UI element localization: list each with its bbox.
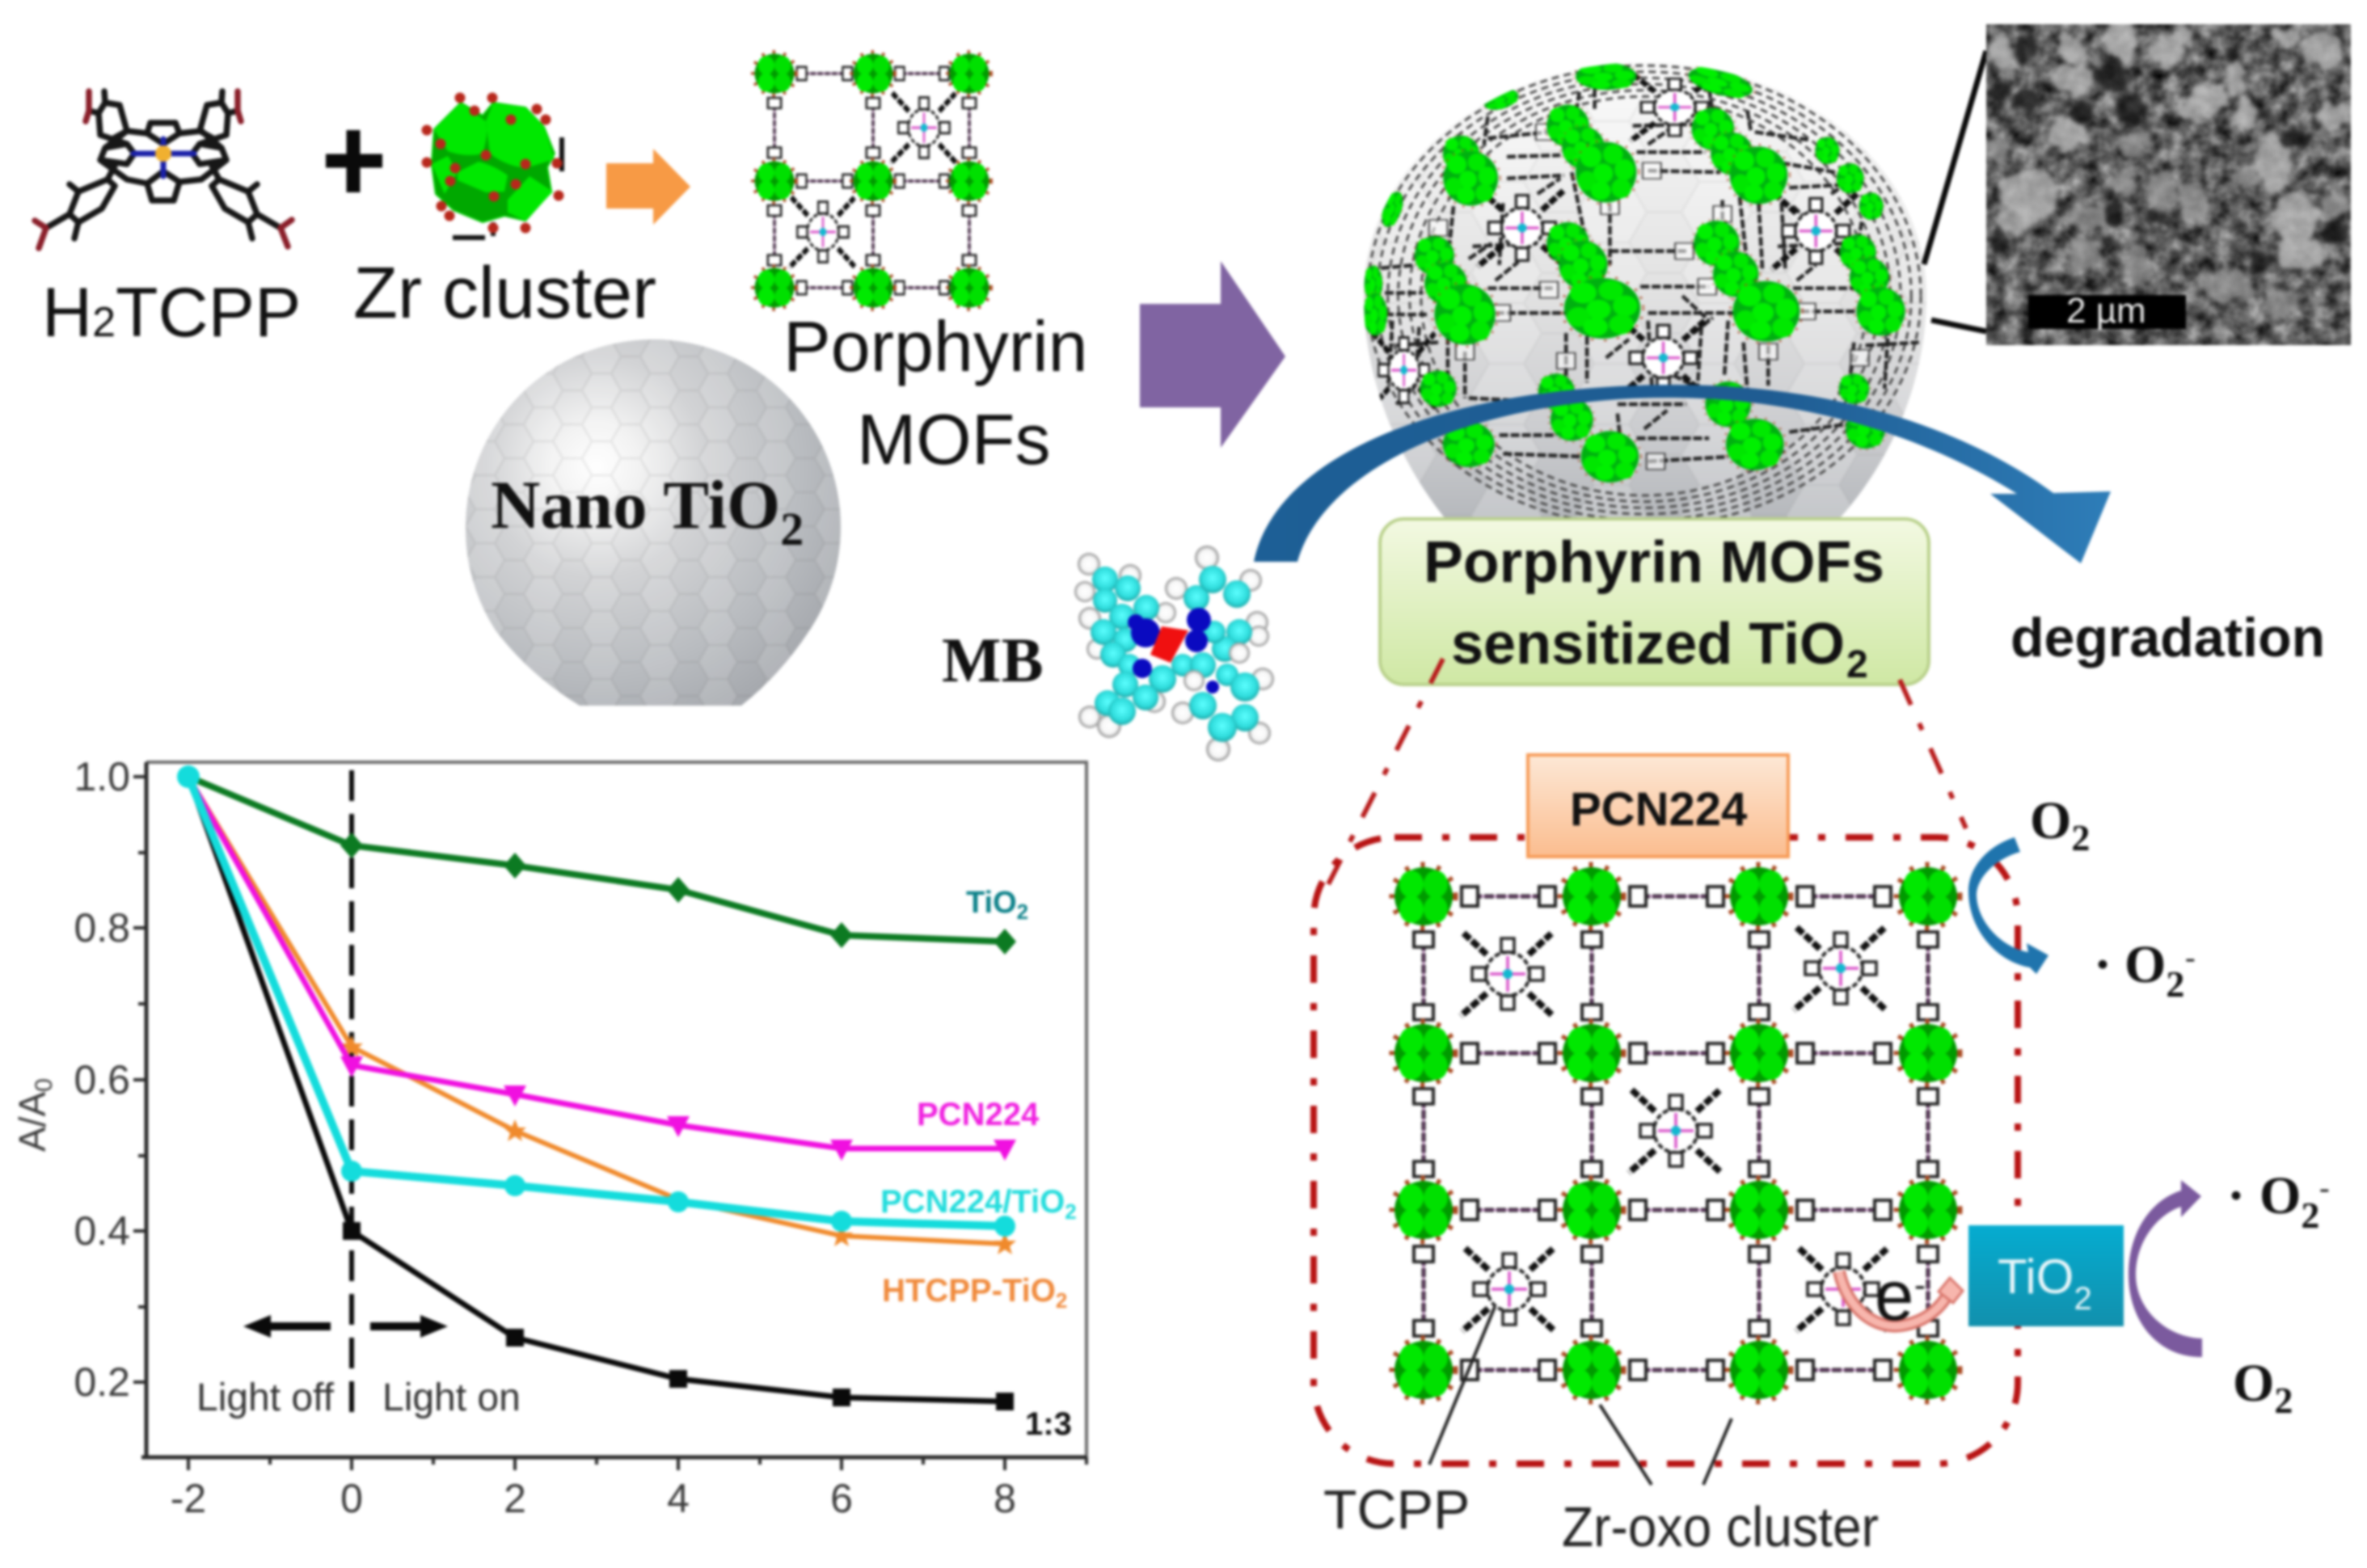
callout: Porphyrin MOFs sensitized TiO2: 2 bbox=[1846, 643, 1868, 686]
y-axis tick labels: 0.2 bbox=[74, 1359, 130, 1405]
arrow: purple curved O2 bbox=[2129, 1180, 2202, 1357]
arrow: blue curved O2 bbox=[1968, 837, 2048, 974]
light boundary dashed line bbox=[349, 770, 354, 1418]
label: O2 bottom: 2 bbox=[2274, 1380, 2293, 1421]
label: Zr-oxo cluster: Zr-oxo cluster bbox=[1562, 1495, 1879, 1558]
label: superoxide top bbox=[2094, 935, 2196, 1005]
label: superoxide bottom bbox=[2227, 1166, 2330, 1236]
axes frame bbox=[133, 762, 1086, 1470]
series labels: PCN224/TiO bbox=[880, 1184, 1065, 1220]
icon: H2TCPP molecule bbox=[35, 91, 292, 248]
series labels: TiO bbox=[966, 886, 1017, 920]
label: MB: MB bbox=[942, 625, 1044, 695]
scale bar bbox=[2028, 291, 2186, 331]
label: O2 bottom: O bbox=[2233, 1354, 2274, 1413]
arrow: electron transfer bbox=[1839, 1257, 1963, 1335]
series labels: PCN224 bbox=[917, 1097, 1040, 1132]
label: superoxide top: 2 bbox=[2166, 963, 2184, 1005]
x-axis tick labels: 6 bbox=[830, 1476, 853, 1521]
icon: MB molecule bbox=[1074, 546, 1274, 761]
label box: TiO2 bbox=[1968, 1225, 2124, 1326]
callout: Porphyrin MOFs sensitized TiO2: sensitized TiO bbox=[1451, 612, 1845, 677]
x-axis tick labels: -2 bbox=[171, 1476, 206, 1521]
label box: PCN224 bbox=[1528, 755, 1788, 857]
image: SEM micrograph with scale bar bbox=[1986, 18, 2352, 345]
icon: small porphyrin MOF lattice bbox=[753, 52, 991, 310]
y-axis tick labels: 0.6 bbox=[74, 1057, 130, 1102]
label box: TiO2: 2 bbox=[2074, 1281, 2092, 1317]
icon: plus sign bbox=[326, 130, 382, 192]
icon: Nano TiO2 sphere bbox=[461, 331, 857, 711]
callout: Porphyrin MOFs sensitized TiO2 bbox=[1380, 519, 1929, 686]
label: superoxide top: · bbox=[2094, 935, 2112, 994]
y-axis title: 0 bbox=[31, 1078, 57, 1092]
label: H2TCPP: H2TCPP bbox=[42, 274, 301, 352]
vertical linkers bbox=[1414, 932, 1938, 1336]
light off/on labels: Light on bbox=[382, 1376, 521, 1419]
label: O2 top: O bbox=[2030, 791, 2071, 850]
series labels: 1:3 bbox=[1025, 1406, 1072, 1442]
light off/on arrows bbox=[243, 1315, 448, 1338]
label: Zr cluster: Zr cluster bbox=[353, 253, 656, 334]
label: superoxide bottom: 2 bbox=[2301, 1195, 2319, 1236]
label: Porphyrin MOFs: MOFs bbox=[857, 399, 1051, 479]
label: superoxide bottom: - bbox=[2319, 1171, 2330, 1205]
label: superoxide bottom: · bbox=[2227, 1166, 2245, 1225]
series: black 1:3 bbox=[188, 777, 1014, 1410]
label: superoxide top: O bbox=[2124, 935, 2166, 994]
panel frame: dash-dot rounded outline bbox=[1314, 837, 2018, 1464]
arrow: large blue arc bbox=[1254, 385, 2111, 563]
label: superoxide bottom: O bbox=[2259, 1166, 2301, 1225]
callout: Porphyrin MOFs sensitized TiO2: Porphyrin MOFs bbox=[1424, 530, 1884, 595]
y-axis tick labels: 1.0 bbox=[74, 754, 130, 799]
callout lines to SEM image bbox=[1924, 51, 1986, 331]
series labels: 2 bbox=[1017, 900, 1028, 924]
label: Nano TiO2: 2 bbox=[780, 503, 804, 555]
x-axis tick labels: 2 bbox=[504, 1476, 526, 1521]
label box: PCN224: PCN224 bbox=[1570, 783, 1747, 836]
chart: degradation curves A/A0 vs time bbox=[11, 754, 1086, 1521]
y-axis title: A/A bbox=[11, 1092, 53, 1152]
icon: Zr cluster bbox=[427, 98, 562, 238]
horizontal linkers bbox=[1462, 887, 1891, 1380]
series labels: 2 bbox=[1065, 1199, 1077, 1224]
label: Porphyrin MOFs: Porphyrin bbox=[783, 306, 1088, 386]
x-axis tick labels: 4 bbox=[667, 1476, 690, 1521]
series labels bbox=[880, 886, 1077, 1442]
arrow: electron transfer: e bbox=[1875, 1257, 1913, 1335]
label: Nano TiO2: Nano TiO bbox=[491, 467, 780, 543]
series: TiO2 bbox=[188, 777, 1016, 955]
label: O2 top: 2 bbox=[2071, 817, 2090, 858]
label: Porphyrin MOFs bbox=[783, 306, 1088, 479]
Zr clusters bbox=[1392, 865, 1960, 1402]
series labels: HTCPP-TiO bbox=[882, 1273, 1056, 1309]
label box: TiO2: TiO bbox=[1998, 1250, 2074, 1304]
x-axis tick labels bbox=[171, 1476, 1016, 1521]
icon: MOF coated sphere bbox=[1358, 57, 1932, 526]
x-axis tick labels: 8 bbox=[994, 1476, 1016, 1521]
arrow: orange bbox=[606, 149, 690, 225]
porphyrin units bbox=[1461, 926, 1888, 1331]
series: HTCPP-TiO2 bbox=[188, 777, 1016, 1254]
leader lines: TCPP and Zr-oxo bbox=[1429, 1307, 1732, 1485]
series: PCN224 bbox=[188, 777, 1016, 1161]
connector: dash-dot lines from callout to lattice frame bbox=[1323, 659, 1966, 896]
series: PCN224/TiO2 bbox=[177, 765, 1015, 1237]
chart: PCN224 lattice diagram bbox=[1392, 865, 1960, 1402]
light off/on labels bbox=[196, 1376, 521, 1419]
light off/on labels: Light off bbox=[196, 1376, 335, 1419]
arrow: electron transfer: - bbox=[1914, 1266, 1926, 1304]
label: degradation: degradation bbox=[2010, 607, 2325, 668]
y-axis tick labels: 0.4 bbox=[74, 1208, 130, 1254]
arrow: purple large bbox=[1140, 261, 1285, 448]
label: superoxide top: - bbox=[2185, 941, 2196, 975]
series labels: 2 bbox=[1056, 1288, 1067, 1313]
label: TCPP: TCPP bbox=[1323, 1479, 1470, 1541]
y-axis tick labels bbox=[74, 754, 130, 1405]
scale bar: 2 µm bbox=[2066, 291, 2146, 331]
x-axis tick labels: 0 bbox=[340, 1476, 363, 1521]
y-axis tick labels: 0.8 bbox=[74, 905, 130, 950]
